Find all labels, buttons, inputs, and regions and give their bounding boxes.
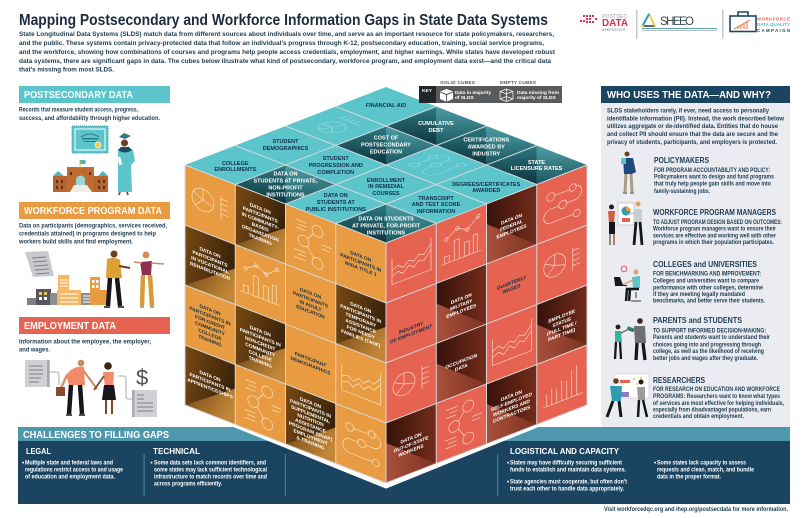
icon: handshake woman	[94, 362, 116, 414]
challenge: legal: of education and employment data.	[25, 474, 115, 480]
cell: SNAP employment and training: NUTRITION	[297, 413, 324, 429]
cube: right face, employment data	[386, 165, 587, 483]
heading: postsecondary data: POSTSECONDARY DATA	[24, 90, 133, 101]
text: postsecondary description: success, and affordability through higher education.	[19, 115, 160, 122]
key	[419, 80, 562, 103]
cell: self-employed workers: WORKERS AND	[493, 398, 530, 419]
cell: TANF: FAMILIES (TANF)	[341, 328, 381, 350]
cell: industry of employment: OF EMPLOYMENT	[390, 324, 432, 346]
cell: students at private for-profit: INSTITUTIONS	[367, 230, 405, 236]
icon: policymaker	[621, 152, 636, 193]
text: workforce program managers: services are effective and working well with other	[653, 232, 776, 240]
icon: parent and student	[615, 318, 646, 360]
cell: SNAP employment and training: EMPLOYMENT	[293, 428, 328, 447]
text: colleges and universities: COLLEGES and UNIVERSITIES	[653, 260, 758, 269]
logo: Postsecondary Data	[580, 14, 628, 32]
icon: handshake man	[56, 360, 97, 415]
cell: student demographics: STUDENT	[273, 139, 299, 145]
challenge: legal	[22, 447, 123, 480]
challenge: legal: Multiple state and federal laws and	[25, 460, 113, 466]
cell: federal employees: DATA ON	[501, 213, 522, 227]
title: Mapping Postsecondary and Workforce Information Gaps in State Data Systems	[19, 12, 548, 29]
cell: employee status: (FULL TIME /	[547, 320, 577, 338]
logo: Postsecondary Data: POSTSEC	[602, 14, 627, 20]
cell: SNAP employment and training: & TRAINING	[296, 435, 325, 452]
challenge: legal: •	[22, 460, 24, 466]
icon: employee records	[25, 360, 59, 387]
text: workforce description	[18, 222, 167, 246]
logo: Workforce Data Quality Campaign: DATA QUALITY	[757, 22, 790, 27]
cell: WIOA title 1: DATA ON	[350, 250, 372, 264]
text: colleges and universities: Colleges and universities want to compare	[653, 278, 759, 284]
cell: financial aid: FINANCIAL AID	[366, 103, 406, 109]
challenge: logistical and capacity: funds to establish and maintain data systems.	[510, 466, 626, 474]
heading band: challenges to filling gaps: CHALLENGES TO FILLING GAPS	[23, 430, 169, 441]
heading band: challenges to filling gaps	[18, 427, 790, 441]
icon: dollar sign: $	[136, 365, 148, 390]
icon: man in conversation	[104, 250, 130, 307]
cell: non-credit training: NON-CREDIT	[245, 335, 275, 353]
text: colleges and universities: performance with other colleges, determine	[653, 284, 763, 292]
icon: college worker at laptop	[614, 266, 641, 301]
heading: employment data: EMPLOYMENT DATA	[24, 321, 116, 332]
cell: federal employees: FEDERAL	[500, 219, 523, 233]
cell: state licensure rates	[486, 146, 587, 184]
text: workforce description: workers build skills and find employment.	[18, 238, 133, 246]
cell: students at private non-profit: STUDENTS AT PRIVATE,	[254, 178, 318, 184]
text: researchers	[653, 376, 784, 420]
text: workforce description: credentials attained) in programs designed to help	[19, 230, 156, 238]
cell: out-of-state workers	[386, 404, 436, 483]
intro text: State Longitudinal Data Systems (SLDS) match data from different sources about individuals over time, and serve as an important resource for state policymakers, researchers,	[19, 31, 554, 38]
icon: researchers	[607, 374, 649, 417]
text: parents and students: Parents and students want to understand their	[653, 334, 770, 341]
logo: Workforce Data Quality Campaign: CAMPAIGN	[757, 28, 790, 33]
cell: occupation data	[436, 324, 486, 404]
cell: for-credit training: PARTICIPANTS IN	[189, 306, 231, 328]
cell: students at private non-profit: INSTITUTIONS	[266, 192, 305, 198]
cell: WIOA title 1: PARTICIPANTS IN	[340, 252, 382, 274]
key: EMPTY CUBES	[500, 80, 537, 86]
cell: vocational rehabilitation	[185, 225, 235, 304]
icon: empty cube	[500, 89, 513, 102]
cell: college enrollments: COLLEGE	[222, 161, 249, 167]
cell: cost of postsecondary education: POSTSECONDARY	[361, 142, 411, 148]
cell: cumulative debt	[386, 106, 486, 146]
cell: WIOA title 1: WIOA TITLE 1	[345, 260, 377, 278]
intro text: and the public. These systems contain privacy-protected data that follow an individual’s progress through K-12, postsecondary education, training, social service programs,	[19, 40, 544, 47]
text: colleges and universities: FOR BENCHMARKING AND IMPROVEMENT:	[653, 270, 761, 278]
cell: students at private for-profit: AT PRIVATE, FOR-PROFIT	[352, 224, 421, 230]
cell: public institutions: DATA ON	[324, 193, 348, 199]
logo: Postsecondary Data: at IHEP INSTITUTE	[602, 28, 627, 32]
challenge: technical: across programs efficiently.	[154, 480, 222, 488]
cell: self-employed workers: DATA ON	[501, 389, 522, 403]
cell: certifications by industry: CERTIFICATIONS	[463, 138, 509, 144]
cell: for-credit training: COMMUNITY	[195, 320, 226, 338]
cell: occupation data: OCCUPATION	[445, 353, 477, 371]
cell: quarterly wages: WAGES	[503, 283, 521, 296]
cell: federal employees: EMPLOYEES	[496, 223, 527, 241]
cell: federal employees	[486, 185, 537, 264]
cell: college enrollments: ENROLLMENTS	[214, 167, 257, 173]
cell: students at private for-profit: DATA ON STUDENTS	[358, 216, 414, 222]
cube: left face, workforce program data	[185, 165, 386, 483]
icon: university building	[53, 160, 108, 192]
text: colleges and universities	[653, 260, 765, 304]
cell: students at private non-profit: DATA ON	[273, 172, 298, 178]
text: postsecondary description	[19, 106, 160, 122]
cell: student demographics: DEMOGRAPHICS	[263, 146, 309, 152]
cell: employee status: STATUS	[552, 316, 572, 329]
cell: non-credit training: COMMUNITY	[245, 342, 276, 359]
key: SOLID CUBES	[440, 80, 476, 86]
challenge: legal: regulations restrict access to and usage	[25, 466, 123, 474]
cell: apprenticeships: APPRENTICESHIPS	[187, 377, 233, 401]
cell: vocational rehabilitation: PARTICIPANTS	[193, 250, 228, 269]
logo: Workforce Data Quality Campaign: WORKFORCE	[757, 16, 790, 22]
cell: transcript and test score: AND TEST SCORE	[412, 202, 461, 208]
cell: occupation data: DATA	[455, 363, 468, 373]
cell: community-based training: IN COMMUNITY-	[242, 211, 279, 232]
cell: certifications by industry	[436, 126, 536, 165]
heading: who uses the data	[601, 86, 790, 103]
cell: adult education	[293, 284, 329, 322]
cell: certifications by industry: AWARDED BY	[468, 144, 505, 150]
cell: remedial courses: IN REMEDIAL	[368, 184, 405, 190]
cell: SNAP employment and training: DATA ON	[300, 396, 321, 410]
cell: self-employed workers	[486, 365, 537, 444]
intro text	[19, 31, 556, 74]
cell: adult education: PARTICIPANTS	[293, 290, 329, 310]
challenge: logistical and capacity: •	[507, 460, 509, 466]
heading: workforce program data	[19, 202, 170, 219]
cell: SNAP employment and training: SUPPLEMENTAL	[291, 404, 330, 425]
challenge: legal: LEGAL	[26, 447, 51, 456]
panel: workforce program data	[18, 202, 170, 307]
text: workforce program managers	[653, 208, 782, 246]
cell: TANF: ASSISTANCE	[345, 318, 377, 336]
text: researchers: especially from disadvantaged populations, earn	[653, 406, 771, 414]
text: employment description: and wages.	[19, 346, 50, 354]
text: colleges and universities: if they are meeting legally mandated	[653, 291, 745, 298]
cell: WIOA title 1	[340, 246, 382, 280]
cell: transcript and test score: INFORMATION	[417, 209, 455, 215]
icon: woman in conversation	[134, 252, 164, 307]
cell: TANF: PARTICIPANTS IN	[340, 303, 382, 325]
heading: who uses the data: WHO USES THE DATA—AND WHY?	[607, 90, 771, 101]
cell: apprenticeships	[185, 345, 235, 424]
text: parents and students	[653, 316, 770, 362]
cell: participant demographics: PARTICIPANT	[295, 351, 326, 369]
cell: students at private non-profit	[235, 165, 336, 204]
text: parents and students: TO SUPPORT INFORMED DECISION-MAKING:	[653, 328, 766, 334]
cell: employee status: EMPLOYEE	[548, 308, 576, 325]
cell: community-based training: ORGANIZATION	[242, 224, 279, 244]
text: policymakers: POLICYMAKERS	[654, 156, 710, 165]
challenge: logistical and capacity: data in the proper format.	[657, 474, 721, 480]
cell: student progression: STUDENT	[323, 156, 349, 162]
key: Data missing from	[517, 90, 559, 96]
cell: student progression: PROGRESSION AND	[309, 163, 363, 169]
divider: logos	[722, 10, 724, 39]
logo: Postsecondary Data: DATA	[602, 18, 628, 29]
cell: cost of postsecondary education: COST OF	[374, 136, 399, 142]
cell: self-employed workers: SELF-EMPLOYED	[491, 391, 532, 413]
panel: postsecondary data	[19, 86, 170, 195]
challenge: technical: TECHNICAL	[153, 447, 200, 456]
icon: graduate	[117, 133, 135, 195]
cell: cost of postsecondary education	[336, 126, 436, 165]
cube: top face, postsecondary data	[185, 87, 587, 243]
cell: cost of postsecondary education: EDUCATION	[370, 150, 402, 156]
text: stakeholder summary: utilizes aggregate or de-identified data. Entities that do house	[607, 123, 778, 130]
cell: non-credit training: PARTICIPANTS IN	[240, 327, 281, 349]
cell: students at private for-profit	[336, 204, 436, 243]
cell: employee status: PART TIME)	[548, 327, 576, 343]
cell: community-based training: PARTICIPANTS	[243, 206, 278, 225]
cell: out-of-state workers: DATA ON	[400, 432, 422, 446]
text: researchers: credentials and obtain employment.	[653, 413, 744, 420]
challenge: logistical and capacity: requests and clean, match, and bundle	[657, 466, 754, 474]
cell: non-credit training	[235, 304, 286, 384]
key: Data in majority	[455, 90, 491, 96]
challenge: technical	[150, 447, 267, 488]
divider: logos	[636, 10, 638, 39]
cell: vocational rehabilitation: DATA ON	[199, 246, 221, 260]
key: KEY	[422, 88, 433, 94]
text: stakeholder summary: SLDS stakeholders rarely, if ever, need access to personally	[607, 108, 769, 114]
text: policymakers: that truly help people gain skills and move into	[654, 180, 771, 188]
key: of SLDS	[455, 95, 474, 101]
cell: non-credit training: COLLEGE	[249, 349, 273, 364]
text: researchers: PROGRAMS: Researchers want to know what types	[653, 393, 780, 400]
cube white outline	[183, 85, 589, 487]
cell: for-credit training: COLLEGE	[198, 328, 222, 343]
heading: employment data	[19, 317, 170, 334]
cell: industry of employment: INDUSTRY	[399, 321, 424, 336]
cell: military employees	[436, 264, 486, 344]
cell: community-based training: BASED	[252, 221, 269, 234]
heading: postsecondary data	[19, 86, 170, 103]
cell: transcript and test score: TRANSCRIPT	[418, 196, 454, 202]
text: workforce program managers: WORKFORCE PROGRAM MANAGERS	[653, 208, 777, 217]
text: policymakers: FOR PROGRAM ACCOUNTABILITY AND POLICY:	[654, 167, 770, 174]
text: colleges and universities: benchmarks, and better serve their students.	[653, 298, 765, 304]
key: majority of SLDS	[517, 95, 556, 101]
heading: workforce program data: WORKFORCE PROGRAM DATA	[24, 206, 162, 217]
cell: certifications by industry: INDUSTRY	[472, 152, 501, 158]
footer: Visit workforcedqc.org and ihep.org/postsecdata for more information.	[604, 507, 788, 513]
challenge: logistical and capacity	[507, 447, 754, 492]
logo: SHEEO: SHEEO	[660, 16, 694, 28]
challenge: logistical and capacity: Some states lack capacity to assess	[657, 460, 746, 466]
cell: for-credit training	[189, 300, 231, 352]
challenge: logistical and capacity: States may have difficulty securing sufficient	[510, 460, 622, 466]
logo: SHEEO	[642, 14, 717, 31]
text: workforce program managers: Workforce program managers want to ensure their	[653, 226, 776, 232]
panel: who uses the data	[601, 86, 790, 427]
icon: wage record	[118, 376, 157, 417]
cell: apprenticeships: PARTICIPANTS IN	[189, 372, 231, 394]
cell: employee status	[537, 285, 587, 364]
cell: community-based training: TRAINING	[249, 233, 272, 247]
text: postsecondary description: Records that measure student access, progress,	[19, 106, 138, 114]
cell: student progression: COMPLETION	[317, 170, 354, 176]
text: employment description	[19, 338, 151, 354]
cell: SNAP employment and training: PARTICIPANTS IN	[290, 398, 331, 420]
background: challenges	[18, 441, 790, 504]
text: researchers: RESEARCHERS	[653, 376, 706, 385]
cell: TANF: FOR NEEDY	[347, 324, 375, 341]
text: parents and students: choices going into and progressing through	[653, 342, 761, 348]
cell: SNAP employment and training: PROGRAM (SNAP)	[289, 421, 332, 443]
cell: cumulative debt: DEBT	[429, 128, 444, 134]
text: parents and students: PARENTS and STUDENTS	[653, 316, 743, 325]
cell: quarterly wages: QUARTERLY	[497, 274, 527, 292]
logo: Workforce Data Quality Campaign	[730, 12, 790, 33]
text: stakeholder summary	[607, 108, 785, 146]
text: policymakers: family-sustaining jobs.	[654, 188, 710, 195]
icon: program managers	[608, 202, 642, 245]
cell: non-credit training: DATA ON	[250, 325, 271, 339]
cell: public institutions: PUBLIC INSTITUTIONS	[306, 207, 366, 213]
intro text: data systems, there are significant gaps in data. The cubes below illustrate what kind of postsecondary, workforce program, and employment data exist—and the critical data	[19, 58, 551, 65]
challenge: logistical and capacity: LOGISTICAL AND CAPACITY	[510, 447, 620, 456]
cell: degrees and certificates: AWARDED	[472, 188, 500, 194]
cell: vocational rehabilitation: IN VOCATIONAL	[191, 255, 229, 276]
text: workforce program managers: programs in which their population participates.	[653, 239, 774, 246]
challenge: technical: infrastructure to match records over time and	[154, 474, 267, 480]
intro text: that’s missing from most SLDS.	[19, 66, 114, 74]
cell: TANF	[336, 284, 386, 363]
cell: out-of-state workers: WORKERS	[398, 443, 424, 459]
cell: self-employed workers: CONTRACTORS	[493, 404, 531, 425]
cell: participant demographics: DEMOGRAPHICS	[291, 356, 331, 377]
cell: community-based training: DATA ON	[250, 202, 271, 216]
cell: cumulative debt: CUMULATIVE	[418, 121, 454, 127]
cell: for-credit training: TRAINING	[198, 334, 222, 349]
challenge: logistical and capacity: •	[654, 460, 656, 466]
text: policymakers	[654, 156, 774, 195]
intro text: and the workforce, showing how combinations of courses and programs help people access credentials, employment, and higher earnings. While states have developed robust	[19, 49, 556, 56]
cell: adult education: DATA ON	[300, 287, 321, 301]
text: parents and students: college, as well as the likelihood of receiving	[653, 348, 764, 355]
icon: document	[25, 251, 54, 277]
cell: non-credit training: TRAINING	[249, 355, 272, 370]
cell: military employees: MILITARY	[450, 298, 473, 313]
panel: challenges	[18, 427, 790, 504]
cell: vocational rehabilitation: REHABILITATION	[190, 261, 230, 282]
icon: solid cube	[440, 89, 453, 102]
cell: military employees: EMPLOYEES	[446, 303, 477, 320]
text: workforce description: Data on participants (demographics, services received,	[19, 222, 167, 230]
panel: employment data	[19, 317, 170, 417]
cell: out-of-state workers: OUT-OF-STATE	[394, 435, 429, 455]
cell: for-credit training: DATA ON	[199, 304, 221, 318]
cell: TANF: DATA ON	[350, 301, 372, 315]
cell: state licensure rates: LICENSURE RATES	[511, 166, 563, 172]
text: stakeholder summary: identifiable information (PII). Instead, the work described below	[607, 116, 785, 122]
cell: apprenticeships: DATA ON	[199, 370, 221, 384]
cell: community-based training	[235, 184, 286, 264]
cell: SNAP employment and training	[286, 384, 336, 463]
cell: adult education: IN ADULT	[300, 299, 321, 313]
challenge: technical: •	[150, 460, 153, 466]
cell: students at private non-profit: NON-PROFIT	[268, 186, 303, 192]
challenge: logistical and capacity: State agencies must cooperate, but often don’t	[510, 478, 627, 486]
icon: diploma	[72, 126, 108, 153]
cell: remedial courses: ENROLLMENT	[367, 178, 406, 184]
cell: degrees and certificates: DEGREES/CERTIFICATES	[452, 182, 521, 188]
cell: public institutions: STUDENTS AT	[317, 200, 355, 206]
text: policymakers: Policymakers want to design and fund programs	[654, 174, 774, 180]
cell: for-credit training: FOR-CREDIT	[195, 314, 225, 332]
icon: city buildings	[27, 275, 107, 305]
challenge: technical: Some data sets lack common identifiers, and	[154, 460, 266, 466]
cell: SNAP employment and training: ASSISTANCE	[295, 417, 326, 435]
text: employment description: Information about the employee, the employer,	[19, 338, 151, 346]
cell: state licensure rates: STATE	[528, 160, 545, 166]
cell: military employees: DATA ON	[451, 292, 472, 306]
cell: adult education: EDUCATION	[296, 304, 325, 321]
text: stakeholder summary: and collect PII should ensure that the data are secure and the	[607, 131, 778, 138]
cell: remedial courses: COURSES	[372, 191, 400, 197]
challenge: logistical and capacity: trust each other to handle data appropriately.	[510, 486, 624, 492]
text: stakeholder summary: privacy of students, participants, and employers is protected.	[607, 139, 777, 146]
challenge: technical: some states may lack sufficient technological	[154, 466, 267, 474]
text: parents and students: better jobs and wages after they graduate.	[653, 355, 758, 362]
cell: TANF: TEMPORARY	[345, 312, 377, 330]
challenge: logistical and capacity: •	[507, 478, 509, 486]
